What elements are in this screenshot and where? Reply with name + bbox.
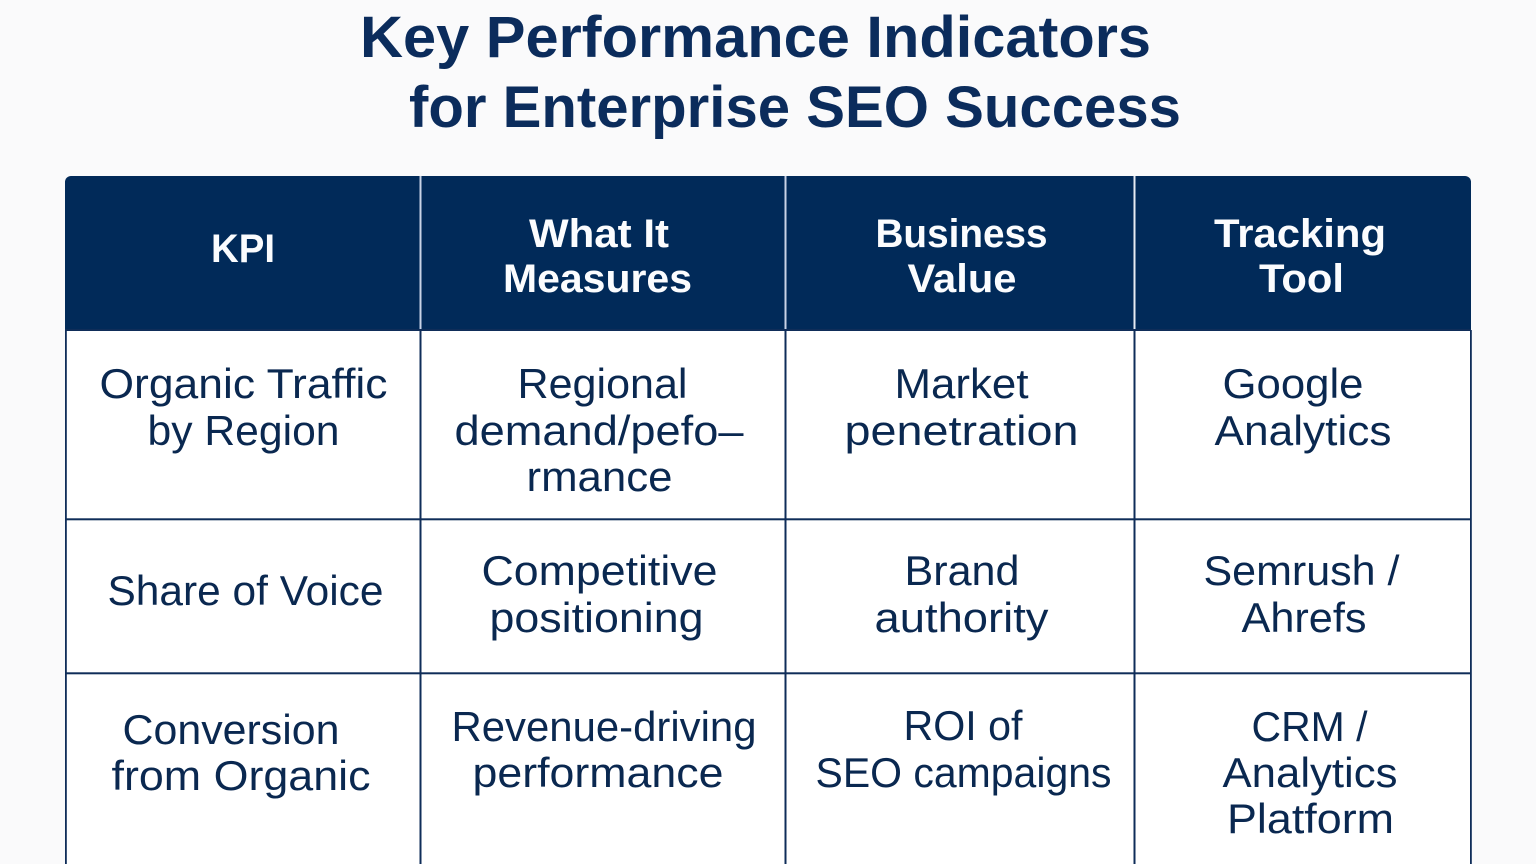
table header row: Business xyxy=(876,212,1048,256)
row: Share of Voice: Brand xyxy=(904,547,1020,594)
row: Share of Voice: Ahrefs xyxy=(1242,594,1366,641)
row: Conversion from Organic: Conversion xyxy=(122,706,340,753)
table grid lines xyxy=(65,329,1472,864)
table header row: Measures xyxy=(503,257,692,301)
table header row: What It xyxy=(529,212,669,256)
table header row: KPI xyxy=(211,227,275,271)
row: Organic Traffic by Region: demand/pefo– xyxy=(454,407,744,454)
row: Share of Voice: Competitive xyxy=(482,547,718,594)
row: Organic Traffic by Region xyxy=(100,360,1392,500)
row: Conversion from Organic: CRM / xyxy=(1252,703,1368,750)
row: Share of Voice: Semrush / xyxy=(1204,547,1400,594)
row: Conversion from Organic: ROI of xyxy=(904,702,1023,749)
row: Organic Traffic by Region: Market xyxy=(894,360,1029,407)
row: Organic Traffic by Region: Organic Traffic xyxy=(100,360,388,407)
title: Key Performance Indicators xyxy=(360,5,1151,70)
row: Share of Voice: positioning xyxy=(490,594,704,641)
table header row xyxy=(65,176,1471,330)
row: Conversion from Organic: Analytics xyxy=(1222,749,1398,796)
row: Organic Traffic by Region: rmance xyxy=(526,453,672,500)
row: Organic Traffic by Region: Analytics xyxy=(1214,407,1392,454)
table header row: Tool xyxy=(1259,257,1344,301)
row: Conversion from Organic: SEO campaigns xyxy=(816,749,1112,796)
row: Organic Traffic by Region: by Region xyxy=(148,407,340,454)
row: Organic Traffic by Region: penetration xyxy=(844,407,1078,454)
row: Share of Voice: Share of Voice xyxy=(108,567,384,614)
row: Organic Traffic by Region: Google xyxy=(1222,360,1364,407)
row: Conversion from Organic: performance xyxy=(472,749,724,796)
row: Share of Voice xyxy=(108,547,1400,641)
table body panel xyxy=(66,330,1471,864)
row: Conversion from Organic xyxy=(112,702,1398,842)
title: for Enterprise SEO Success xyxy=(409,75,1181,140)
KPI table xyxy=(65,176,1472,864)
row: Share of Voice: authority xyxy=(874,594,1048,641)
row: Conversion from Organic: from Organic xyxy=(112,752,370,799)
title xyxy=(360,5,1181,140)
table header row: Value xyxy=(908,257,1016,301)
table header row: Tracking xyxy=(1214,212,1386,256)
row: Organic Traffic by Region: Regional xyxy=(518,360,688,407)
row: Conversion from Organic: Revenue-driving xyxy=(452,703,756,750)
row: Conversion from Organic: Platform xyxy=(1227,795,1394,842)
